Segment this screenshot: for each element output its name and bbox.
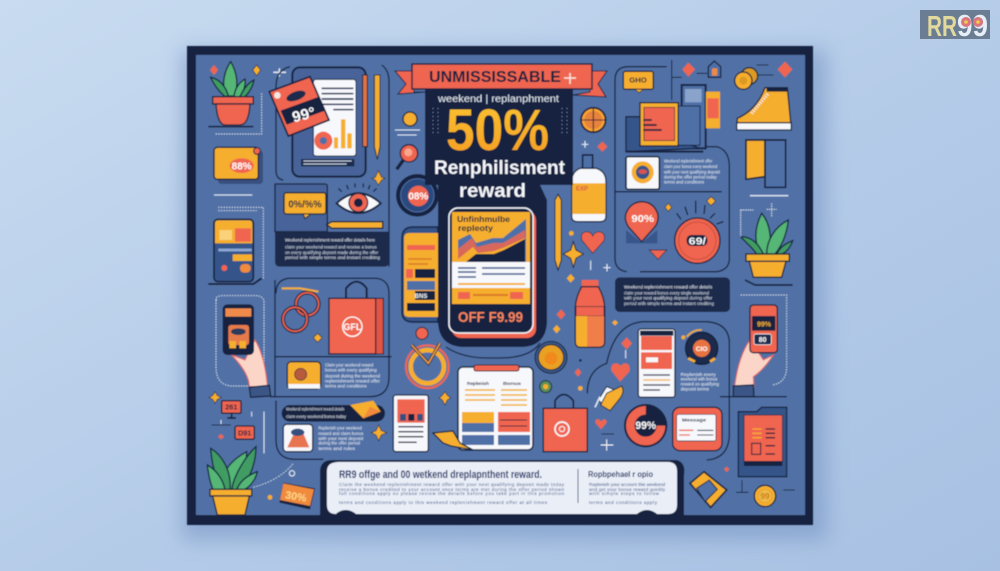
icon: orange pencil xyxy=(363,75,367,147)
icon: bottle: EXP xyxy=(576,187,588,193)
icon: sync ring: CIO xyxy=(696,346,708,353)
area chart xyxy=(458,219,526,262)
text block: right description: with your next qualifying deposit during offer xyxy=(624,295,713,301)
icon: folded panels xyxy=(746,140,788,196)
tag: monitor red xyxy=(222,401,241,418)
side body: Replenish your account this weekend xyxy=(589,482,665,487)
upper-right section xyxy=(555,60,793,285)
panel: rings and shopping bag xyxy=(270,278,392,397)
summary body xyxy=(339,482,565,505)
summary body: full conditions apply so please review the details before you take part in this promotion xyxy=(339,491,564,496)
icon: discount button xyxy=(649,197,723,263)
text block: caption: Replenish every xyxy=(681,372,716,377)
icon: small heart and plus xyxy=(595,419,614,451)
card: white illustration and text: during the offer period xyxy=(318,441,360,446)
card: offer icon and text: during the offer period today xyxy=(664,174,717,179)
icon: orange bottle xyxy=(575,280,605,347)
icon: hand holding phone right xyxy=(720,295,787,397)
icon: yellow chat: GHO xyxy=(629,75,647,84)
icon: target ring xyxy=(581,108,607,152)
card: white illustration and text: with your next deposit xyxy=(318,436,364,441)
card: offer icon and text: Claim your weekend reward xyxy=(325,363,374,369)
panel: rounded lower-left section xyxy=(276,401,387,459)
main poster panel xyxy=(187,46,813,525)
panel: outline xyxy=(615,67,729,272)
text block: caption xyxy=(681,372,719,391)
icon: document card xyxy=(393,395,428,452)
icon: sparkle centre xyxy=(439,392,451,405)
summary body: receive a bonus credited to your account once terms are met during the offer period shown xyxy=(339,487,564,492)
icon: potted plant bottom left xyxy=(207,447,257,515)
card: discount: 88% xyxy=(232,161,252,172)
icon: sparkles centre right xyxy=(563,231,611,283)
icon: coral shopping bag: GFL xyxy=(343,322,362,332)
headline: 50%: 50% xyxy=(446,98,549,163)
clipboard: central lower document: Bonus xyxy=(503,381,522,386)
phone: left small promo xyxy=(402,227,438,322)
side body: with simple steps to follow xyxy=(589,491,660,496)
logo: RR99: 99 xyxy=(957,8,988,43)
icon: discount coin ring: 08% xyxy=(408,192,428,203)
text block: left description: claim your weekend reward and receive a bonus xyxy=(285,244,377,250)
icon: mini phone xyxy=(208,219,262,284)
icon: bottle xyxy=(572,155,606,222)
icon: sync ring xyxy=(681,330,718,364)
logo: RR99 xyxy=(920,8,990,43)
card: offer icon and text xyxy=(287,362,380,389)
icon: hand holding phone left xyxy=(216,296,271,397)
icon: percent map pin xyxy=(625,202,658,243)
text block: right description: claim your reward bonus every single weekend xyxy=(624,290,709,296)
pill: dark label: Weekend replenishment reward details xyxy=(286,407,344,412)
icon: folder document xyxy=(738,407,787,477)
text block: right description: Weekend replenishment reward offer details xyxy=(624,284,713,290)
phone: left small promo: BNS xyxy=(415,294,427,300)
icon: yellow dot and caption xyxy=(395,112,420,135)
card: offer icon and text: claim your bonus every weekend xyxy=(664,164,718,169)
text block: left description: on every qualifying deposit made during the offer xyxy=(285,250,379,256)
text block: caption: deposit terms xyxy=(681,386,710,391)
icon: diamonds and house xyxy=(672,60,792,100)
card: message xyxy=(673,407,722,451)
icon: coral dot and ring with check xyxy=(406,327,449,388)
icon: sparkle left xyxy=(209,392,221,403)
left column and upper-left panels xyxy=(208,62,439,284)
text block: right description xyxy=(615,277,730,312)
bottom summary card xyxy=(320,460,684,522)
text block: left description xyxy=(275,232,389,267)
central dark offer panel xyxy=(395,64,607,358)
banner ribbon: unmissable xyxy=(395,64,607,97)
bubble: percent: 0%/%% xyxy=(288,199,322,210)
summary body: Claim the weekend replenishment reward offer with your next qualifying deposit made today xyxy=(339,482,565,487)
tag: red small: D91 xyxy=(238,428,251,437)
summary body: terms and conditions apply to this weekend replenishment reward offer at all times xyxy=(339,500,548,505)
price: OFF F9.99: OFF F9.99 xyxy=(458,309,523,326)
icon: eye xyxy=(337,183,381,213)
panel: document with tag and pencils xyxy=(269,67,380,177)
panel: outline brackets xyxy=(276,65,389,183)
icon: heart xyxy=(611,363,630,382)
phone: central offer xyxy=(449,208,536,338)
text block: left description: Weekend replenishment reward offer details here xyxy=(285,238,375,244)
chart: donut 99% xyxy=(624,404,667,447)
logo: RR99: RR xyxy=(927,11,957,43)
lower-left section xyxy=(207,278,451,515)
icon: discount coin ring xyxy=(396,174,439,217)
icon: sparkles xyxy=(210,65,385,185)
clipboard: central lower document: Replenish xyxy=(467,381,489,386)
lower-right section xyxy=(535,277,795,507)
heading: Renphilisment: Renphilisment xyxy=(434,158,566,179)
text block: caption: weekend with bonus xyxy=(681,377,718,382)
heading: reward: reward xyxy=(459,181,526,202)
icon: hand holding phone right: 80 xyxy=(759,337,767,344)
icon: brush xyxy=(595,386,623,411)
icon: discount button: 69/ xyxy=(689,236,706,247)
tag: monitor red: 261 xyxy=(225,403,237,412)
panel: lower-right outline xyxy=(587,322,729,460)
card: discount xyxy=(214,147,263,184)
text block: right description: period with simple terms and instant crediting xyxy=(624,301,714,307)
phone: central offer: repleoty xyxy=(458,223,493,233)
card: white illustration and text: reward and claim bonus xyxy=(318,431,364,436)
icon: boot xyxy=(737,88,791,130)
icon: gold coin: 99 xyxy=(761,492,770,501)
icon: tall pencil xyxy=(555,194,561,270)
card: white illustration and text: terms and rules xyxy=(318,446,356,451)
icon: dashed path and coupon xyxy=(253,463,315,509)
card: offer icon and text: terms and conditions xyxy=(325,383,367,389)
icon: dashed path and coupon: 30% xyxy=(284,489,308,505)
side body: and get your bonus reward quickly xyxy=(589,487,666,492)
pill: dark label: claim every weekend bonus today xyxy=(286,414,347,419)
icon: potted plant top left xyxy=(208,62,254,127)
card: offer icon and text: bonus with every qualifying xyxy=(325,368,377,374)
tag: 99 price: 99° xyxy=(291,104,317,126)
icon: coral pin xyxy=(397,145,418,169)
summary title: RR9 offge and 00 wetkend dreplapnthent reward. xyxy=(339,469,542,481)
dotted decoration columns xyxy=(433,108,567,135)
card: offer icon and text: replenishment reward offer xyxy=(325,378,380,384)
card: message: Message xyxy=(682,418,706,423)
icon: hand holding phone right: 99% xyxy=(757,322,772,329)
icon: yellow chat xyxy=(623,71,653,93)
card: offer icon and text: deposit during the weekend xyxy=(325,373,380,379)
icon: potted plant right xyxy=(741,203,793,285)
icon: gold coins xyxy=(735,68,758,89)
card: white illustration and text: Replenish your weekend xyxy=(318,426,362,431)
icon: intertwined rings xyxy=(282,288,319,331)
card: offer icon and text: terms and conditions xyxy=(664,179,705,184)
panel: speech bubble and eye xyxy=(275,183,389,267)
card: white illustration and text xyxy=(283,424,364,452)
side body xyxy=(589,482,666,505)
icon: yellow pencil xyxy=(374,75,380,159)
text block: left description: period with simple terms and instant crediting xyxy=(285,255,380,261)
chart: donut 99%: 99% xyxy=(635,420,657,432)
icon: horizontal pencil xyxy=(327,222,383,228)
card: offer icon and text xyxy=(626,157,721,189)
text block: caption: reward on qualifying xyxy=(681,381,719,386)
side body: terms and conditions apply xyxy=(589,500,658,505)
icon: sparkle diamonds xyxy=(553,309,632,391)
card: offer icon and text: Weekend replenishment offer xyxy=(664,159,713,164)
icon: gold coin xyxy=(736,480,795,507)
icon: gold medal xyxy=(535,341,567,393)
clipboard: central lower document xyxy=(458,365,533,450)
icon: heart xyxy=(581,232,604,253)
subtitle: weekend | replanphment xyxy=(437,94,559,105)
icon: chain link badge xyxy=(690,467,729,507)
card: offer icon and text: with your next qualifying deposit xyxy=(664,169,721,174)
icon: percent map pin: 90% xyxy=(631,214,654,225)
icon: phone document xyxy=(638,329,675,397)
pill: dark label xyxy=(282,401,385,422)
tag: red small xyxy=(235,426,254,439)
side title: Ropbpehael r opio xyxy=(588,470,653,479)
phone title: Unfinhmulbe xyxy=(457,214,510,224)
icon: tilted pen xyxy=(433,431,473,450)
icon: coral shopping bag xyxy=(543,394,587,452)
banner ribbon: unmissable: UNMISSISSABLE xyxy=(429,69,561,86)
icon: open book and papers xyxy=(626,85,720,152)
